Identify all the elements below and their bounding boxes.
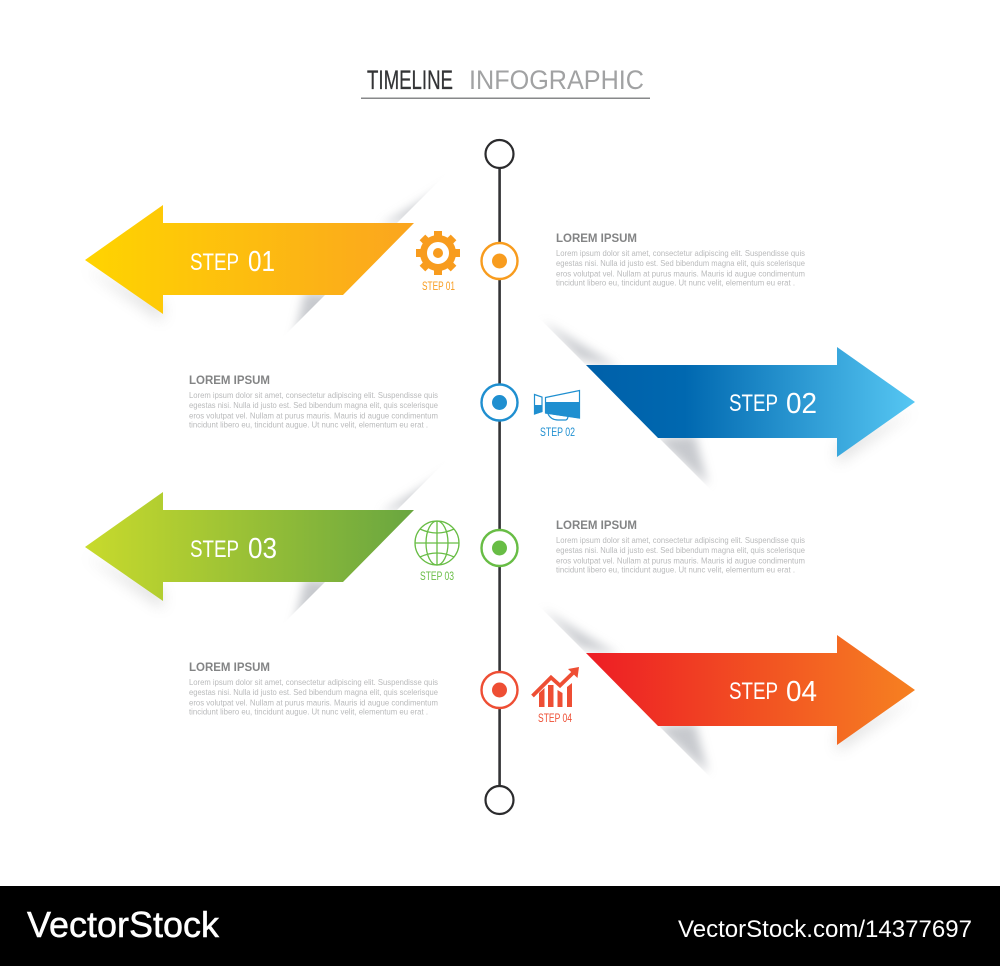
step 03 text: eros volutpat vel. Nullam at purus mauris. Mauris id augue condimentum — [556, 556, 805, 566]
step 04 icon: growth chart — [532, 667, 579, 725]
step 03 icon: globe — [415, 521, 459, 583]
footer bar: VectorStock.com/14377697 — [678, 916, 972, 943]
title — [361, 65, 650, 99]
step 01 node — [482, 243, 518, 279]
step 02 icon: megaphone: STEP 02 — [540, 427, 575, 439]
step 03 text: egestas nisi. Nulla id justo est. Sed bibendum magna elit, quis scelerisque — [556, 545, 805, 555]
step 01 text: tincidunt libero eu, tincidunt augue. Ut nunc velit, elementum eu erat . — [556, 278, 795, 288]
step 02 arrow — [542, 321, 915, 485]
step 04 text: eros volutpat vel. Nullam at purus mauris. Mauris id augue condimentum — [189, 698, 438, 708]
step 04 text: Lorem ipsum dolor sit amet, consectetur adipiscing elit. Suspendisse quis — [189, 677, 438, 687]
step 04 text: tincidunt libero eu, tincidunt augue. Ut nunc velit, elementum eu erat . — [189, 706, 428, 716]
step 01 arrow — [85, 192, 428, 328]
step 01 arrow: STEP — [190, 249, 239, 276]
footer bar — [0, 886, 1000, 966]
step 04 text — [189, 660, 438, 716]
step 04 arrow: 04 — [786, 676, 817, 708]
step 01 text — [556, 231, 805, 288]
step 03 text: tincidunt libero eu, tincidunt augue. Ut nunc velit, elementum eu erat . — [556, 564, 795, 574]
step 02 node — [482, 384, 518, 420]
step 01 text: LOREM IPSUM — [556, 231, 637, 245]
step 03 text: LOREM IPSUM — [556, 518, 637, 532]
timeline axis — [486, 140, 514, 814]
step 01 arrow: 01 — [248, 246, 275, 278]
step 01 text: egestas nisi. Nulla id justo est. Sed bibendum magna elit, quis scelerisque — [556, 258, 805, 268]
step 02 text — [189, 373, 438, 430]
step 04 text: LOREM IPSUM — [189, 660, 270, 674]
footer bar: VectorStock — [27, 904, 220, 945]
step 04 icon: growth chart: STEP 04 — [538, 713, 572, 725]
step 02 icon: megaphone — [534, 390, 580, 439]
step 01 text: eros volutpat vel. Nullam at purus mauris. Mauris id augue condimentum — [556, 268, 805, 278]
step 04 arrow — [542, 609, 915, 773]
step 02 arrow: STEP — [729, 390, 778, 417]
title: TIMELINE — [367, 65, 453, 95]
step 02 text: Lorem ipsum dolor sit amet, consectetur adipiscing elit. Suspendisse quis — [189, 390, 438, 400]
step 01 icon: gear — [416, 231, 460, 293]
step 02 text: tincidunt libero eu, tincidunt augue. Ut nunc velit, elementum eu erat . — [189, 420, 428, 430]
step 03 text — [556, 518, 805, 574]
step 02 arrow: 02 — [786, 388, 817, 420]
title: INFOGRAPHIC — [469, 65, 644, 95]
step 03 arrow — [85, 478, 428, 615]
step 02 text: LOREM IPSUM — [189, 373, 270, 387]
step 03 arrow: 03 — [248, 533, 277, 565]
step 01 icon: gear: STEP 01 — [422, 281, 455, 293]
step 03 text: Lorem ipsum dolor sit amet, consectetur adipiscing elit. Suspendisse quis — [556, 535, 805, 545]
step 03 icon: globe: STEP 03 — [420, 571, 454, 583]
step 04 arrow: STEP — [729, 678, 778, 705]
step 04 text: egestas nisi. Nulla id justo est. Sed bibendum magna elit, quis scelerisque — [189, 687, 438, 697]
step 04 node — [482, 672, 518, 708]
step 02 text: egestas nisi. Nulla id justo est. Sed bibendum magna elit, quis scelerisque — [189, 400, 438, 410]
step 01 text: Lorem ipsum dolor sit amet, consectetur adipiscing elit. Suspendisse quis — [556, 248, 805, 258]
step 02 text: eros volutpat vel. Nullam at purus mauris. Mauris id augue condimentum — [189, 410, 438, 420]
step 03 arrow: STEP — [190, 536, 239, 563]
step 03 node — [482, 530, 518, 566]
